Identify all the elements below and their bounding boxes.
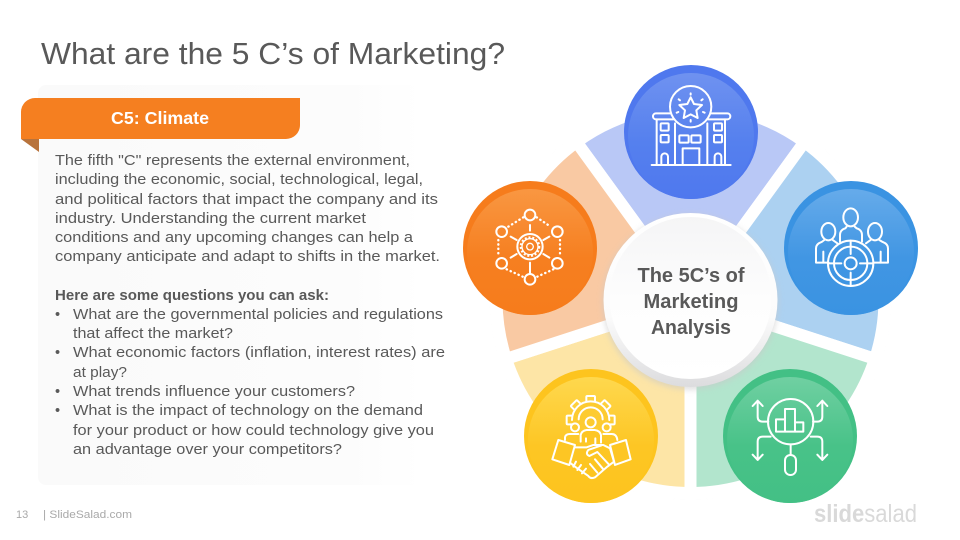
segment: bottom right <box>690 299 875 493</box>
questions list: that affect the market? <box>73 326 233 342</box>
icon: target audience on sky blue circle <box>784 181 918 315</box>
questions list: • <box>55 345 60 361</box>
segment: right <box>690 142 884 359</box>
diagram: 5C wheel <box>463 65 918 503</box>
icon: data analysis magnifier on green circle <box>723 369 857 503</box>
questions list: • <box>55 307 60 323</box>
icon: hotel building on blue circle <box>624 65 758 199</box>
footer: page number and site: 13 <box>16 509 28 521</box>
questions heading: Here are some questions you can ask: <box>55 288 329 304</box>
intro paragraph: and political factors that impact the company and its <box>55 192 438 208</box>
questions list: What are the governmental policies and regulations <box>73 307 443 323</box>
questions list <box>55 307 445 458</box>
ribbon heading: C5: Climate <box>111 108 209 128</box>
intro paragraph: industry. Understanding the current market <box>55 211 366 227</box>
wheel base <box>496 105 884 493</box>
questions list: • <box>55 384 60 400</box>
questions list: • <box>55 403 60 419</box>
icon: gear team handshake on yellow circle <box>524 369 658 503</box>
intro paragraph: conditions and any upcoming changes can help a <box>55 230 414 246</box>
segment: top <box>576 105 804 299</box>
segment: left <box>497 142 690 359</box>
center circle: The 5C’s of <box>638 265 745 287</box>
ribbon heading <box>21 98 300 139</box>
intro paragraph <box>55 153 440 265</box>
segment: bottom left <box>506 299 690 493</box>
intro paragraph: including the economic, social, technological, legal, <box>55 172 423 188</box>
ribbon fold <box>21 139 39 152</box>
panel: C5 Climate <box>21 85 445 485</box>
questions list: What trends influence your customers? <box>73 384 355 400</box>
center circle: Analysis <box>651 317 731 339</box>
questions list: What is the impact of technology on the demand <box>73 403 423 419</box>
icon: network gear on orange circle <box>463 181 597 315</box>
questions list: at play? <box>73 365 127 381</box>
panel background <box>38 85 422 485</box>
intro paragraph: company anticipate and adapt to shifts in the market. <box>55 249 440 265</box>
questions list: for your product or how could technology give you <box>73 423 434 439</box>
questions list: What economic factors (inflation, interest rates) are <box>73 345 445 361</box>
intro paragraph: The fifth "C" represents the external environment, <box>55 153 410 169</box>
footer: page number and site: | SlideSalad.com <box>43 509 132 521</box>
center circle: Marketing <box>644 291 738 313</box>
questions list: an advantage over your competitors? <box>73 442 342 458</box>
title: What are the 5 C’s of Marketing? <box>41 36 505 71</box>
logo: slidesalad: slidesalad <box>814 500 917 528</box>
center circle <box>602 213 778 390</box>
